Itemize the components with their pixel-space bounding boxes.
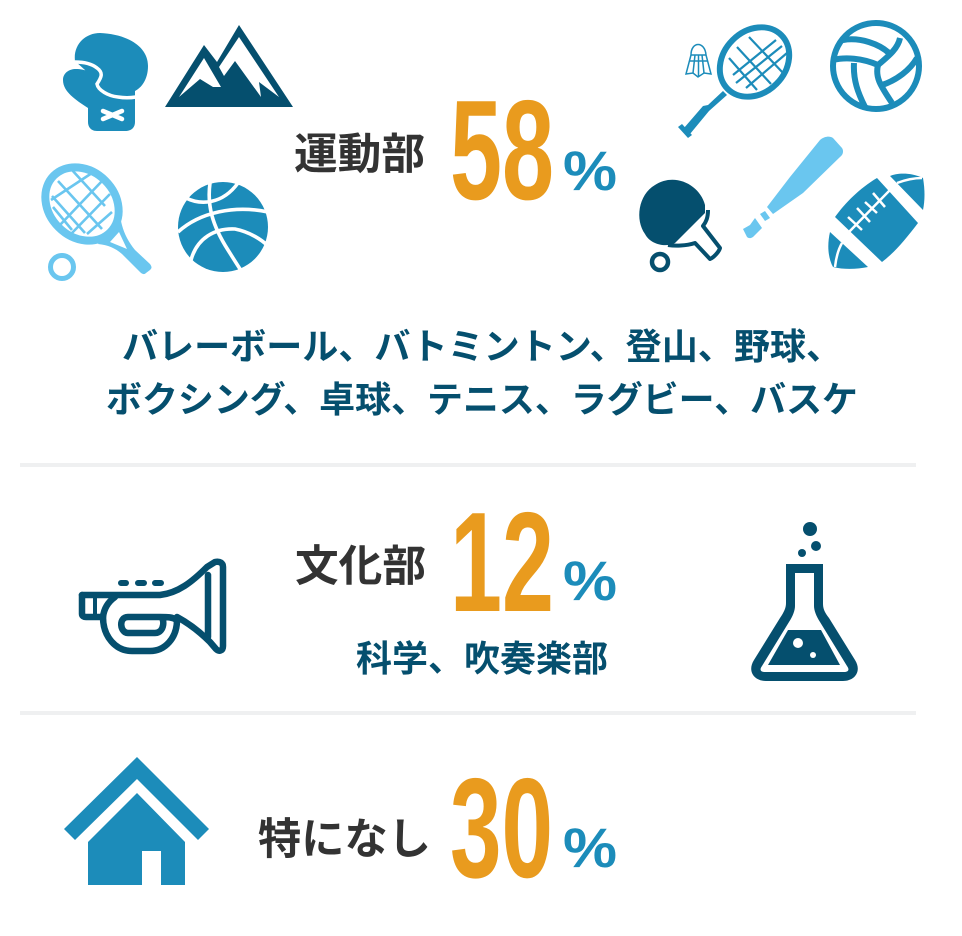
icon: volleyball — [833, 23, 919, 109]
heading: 文化部: 文化部 — [295, 543, 426, 591]
percent sign: % — [563, 139, 617, 202]
icon: basketball — [178, 182, 268, 272]
culture club list: 科学、吹奏楽部 — [356, 638, 608, 679]
icon: trumpet — [82, 562, 223, 651]
sports list: バレーボール、バトミントン、登山、野球、 — [122, 326, 842, 367]
number: 30: 30 — [450, 749, 553, 908]
sports list: ボクシング、卓球、テニス、ラグビー、バスケ — [106, 379, 858, 420]
heading: 特になし: 特になし — [258, 816, 431, 864]
percent sign: % — [563, 549, 617, 612]
number: 58: 58 — [450, 71, 554, 230]
sports list — [106, 326, 858, 420]
icon: house — [64, 757, 209, 885]
icon: tennis racket and ball — [30, 152, 152, 278]
percent sign: % — [563, 816, 617, 879]
icon: boxing glove — [63, 33, 148, 131]
icon: badminton racket and shuttlecock — [678, 13, 803, 138]
icon: mountain — [165, 25, 293, 107]
icon: baseball bat — [743, 137, 843, 238]
heading: 運動部: 運動部 — [294, 131, 425, 179]
icon: american football — [828, 174, 924, 269]
icon: table tennis paddle and ball — [639, 180, 720, 270]
number: 12: 12 — [450, 483, 554, 642]
icon: flask — [751, 522, 858, 681]
